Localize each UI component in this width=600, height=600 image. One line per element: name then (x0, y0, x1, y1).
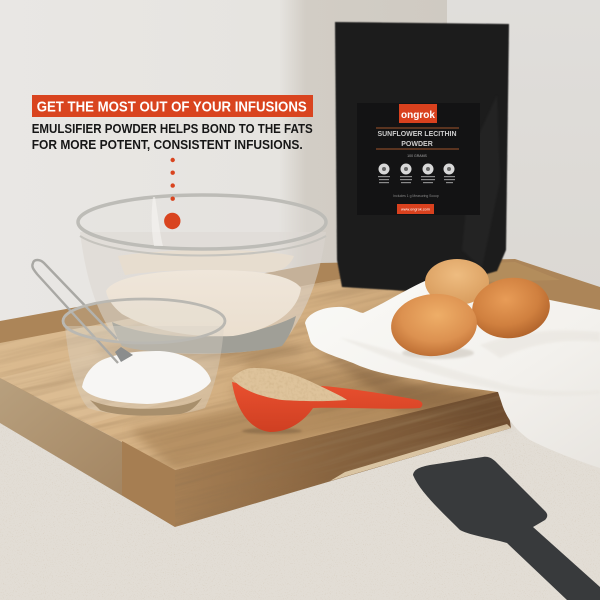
powder (232, 368, 347, 402)
bag url button (397, 204, 434, 214)
headline banner: GET THE MOST OUT OF YOUR INFUSIONS (37, 98, 307, 116)
towel (305, 280, 600, 468)
small glass bowl with sugar (32, 260, 225, 416)
product bag (335, 22, 509, 292)
whisk handle (32, 260, 118, 363)
bag product title: 100 GRAMS (407, 154, 427, 158)
cutting board (0, 279, 511, 527)
quartz counter (0, 378, 600, 600)
dotted callout pointer (164, 158, 180, 229)
body text: FOR MORE POTENT, CONSISTENT INFUSIONS. (32, 137, 303, 152)
board top surface (0, 278, 520, 470)
body text (32, 121, 313, 152)
front egg (388, 290, 480, 360)
bag product title: SUNFLOWER LECITHIN (378, 131, 456, 138)
large glass bowl with flour (78, 195, 326, 360)
bag logo: ongrok (401, 110, 435, 121)
bowl base (112, 316, 296, 354)
bag logo (399, 104, 437, 123)
right egg (468, 273, 554, 343)
spatula (413, 457, 600, 600)
bag feature icons (378, 164, 455, 183)
orange measuring scoop with powder (228, 364, 422, 434)
flour (106, 270, 301, 336)
back egg (425, 259, 489, 305)
background wall (0, 0, 600, 340)
bag small print: Includes 1 g Measuring Scoop (393, 194, 439, 198)
sugar (82, 351, 211, 404)
eggs (388, 259, 554, 360)
board left side (0, 378, 175, 527)
back counter wood (0, 259, 600, 400)
bag product title (376, 128, 459, 158)
body text: EMULSIFIER POWDER HELPS BOND TO THE FATS (32, 121, 313, 136)
bag product title: POWDER (401, 141, 433, 148)
bag label panel (357, 103, 480, 215)
bag url button: www.ongrok.com (401, 208, 430, 212)
board right side (175, 390, 511, 527)
